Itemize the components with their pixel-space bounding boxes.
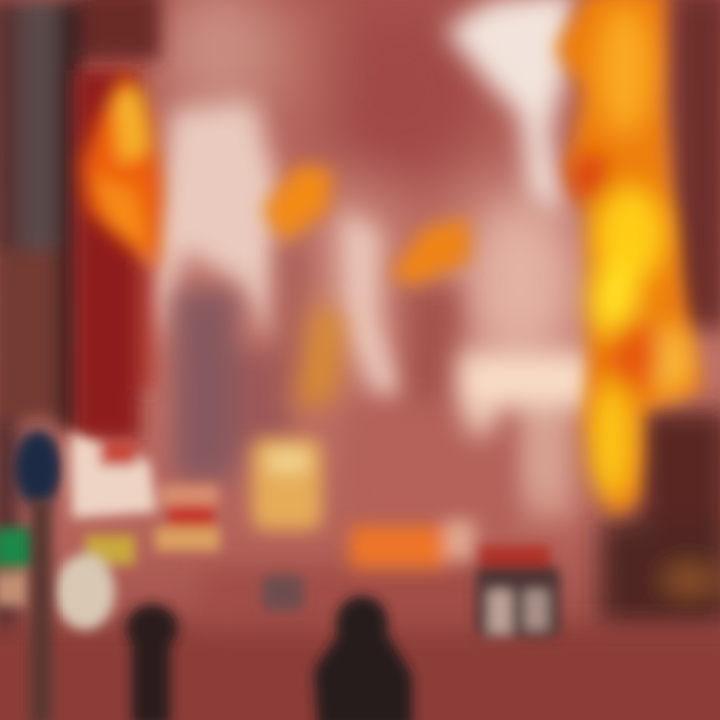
smoke column centre bbox=[340, 210, 410, 405]
orange glowing sign bbox=[350, 520, 475, 568]
white smoke centre left bbox=[145, 100, 280, 345]
small flame centre right bbox=[390, 218, 470, 285]
street floor bbox=[0, 570, 720, 720]
background buildings bbox=[175, 240, 575, 530]
left red building bbox=[74, 70, 154, 440]
right fire hot core bbox=[572, 5, 690, 500]
sign: white low bbox=[55, 554, 115, 630]
sign: green bbox=[0, 528, 38, 568]
distant crowd bbox=[262, 546, 560, 637]
silhouette: centre figure bbox=[314, 596, 412, 720]
sign: white bbox=[70, 432, 156, 518]
dark pole bbox=[30, 500, 52, 720]
silhouette: left figure bbox=[126, 604, 178, 720]
right dark building bbox=[600, 0, 720, 630]
bright glow right of centre bbox=[458, 352, 594, 495]
ember streak centre bbox=[295, 300, 345, 410]
left fire bbox=[82, 70, 162, 268]
small flame centre left bbox=[262, 165, 332, 242]
sign: red mark bbox=[100, 442, 136, 466]
glowing yellow sign bbox=[252, 438, 322, 530]
sign: red and cream bbox=[160, 485, 218, 507]
sign: yellow bbox=[85, 535, 135, 565]
street signs left bbox=[0, 430, 220, 630]
hazy smoke glow bbox=[160, 0, 580, 370]
right fire column bbox=[555, 0, 700, 515]
left dark tower bbox=[0, 0, 160, 720]
sign: blue bbox=[14, 430, 62, 506]
white smoke top right bbox=[445, 0, 575, 215]
sign: pale lower bbox=[0, 572, 30, 606]
